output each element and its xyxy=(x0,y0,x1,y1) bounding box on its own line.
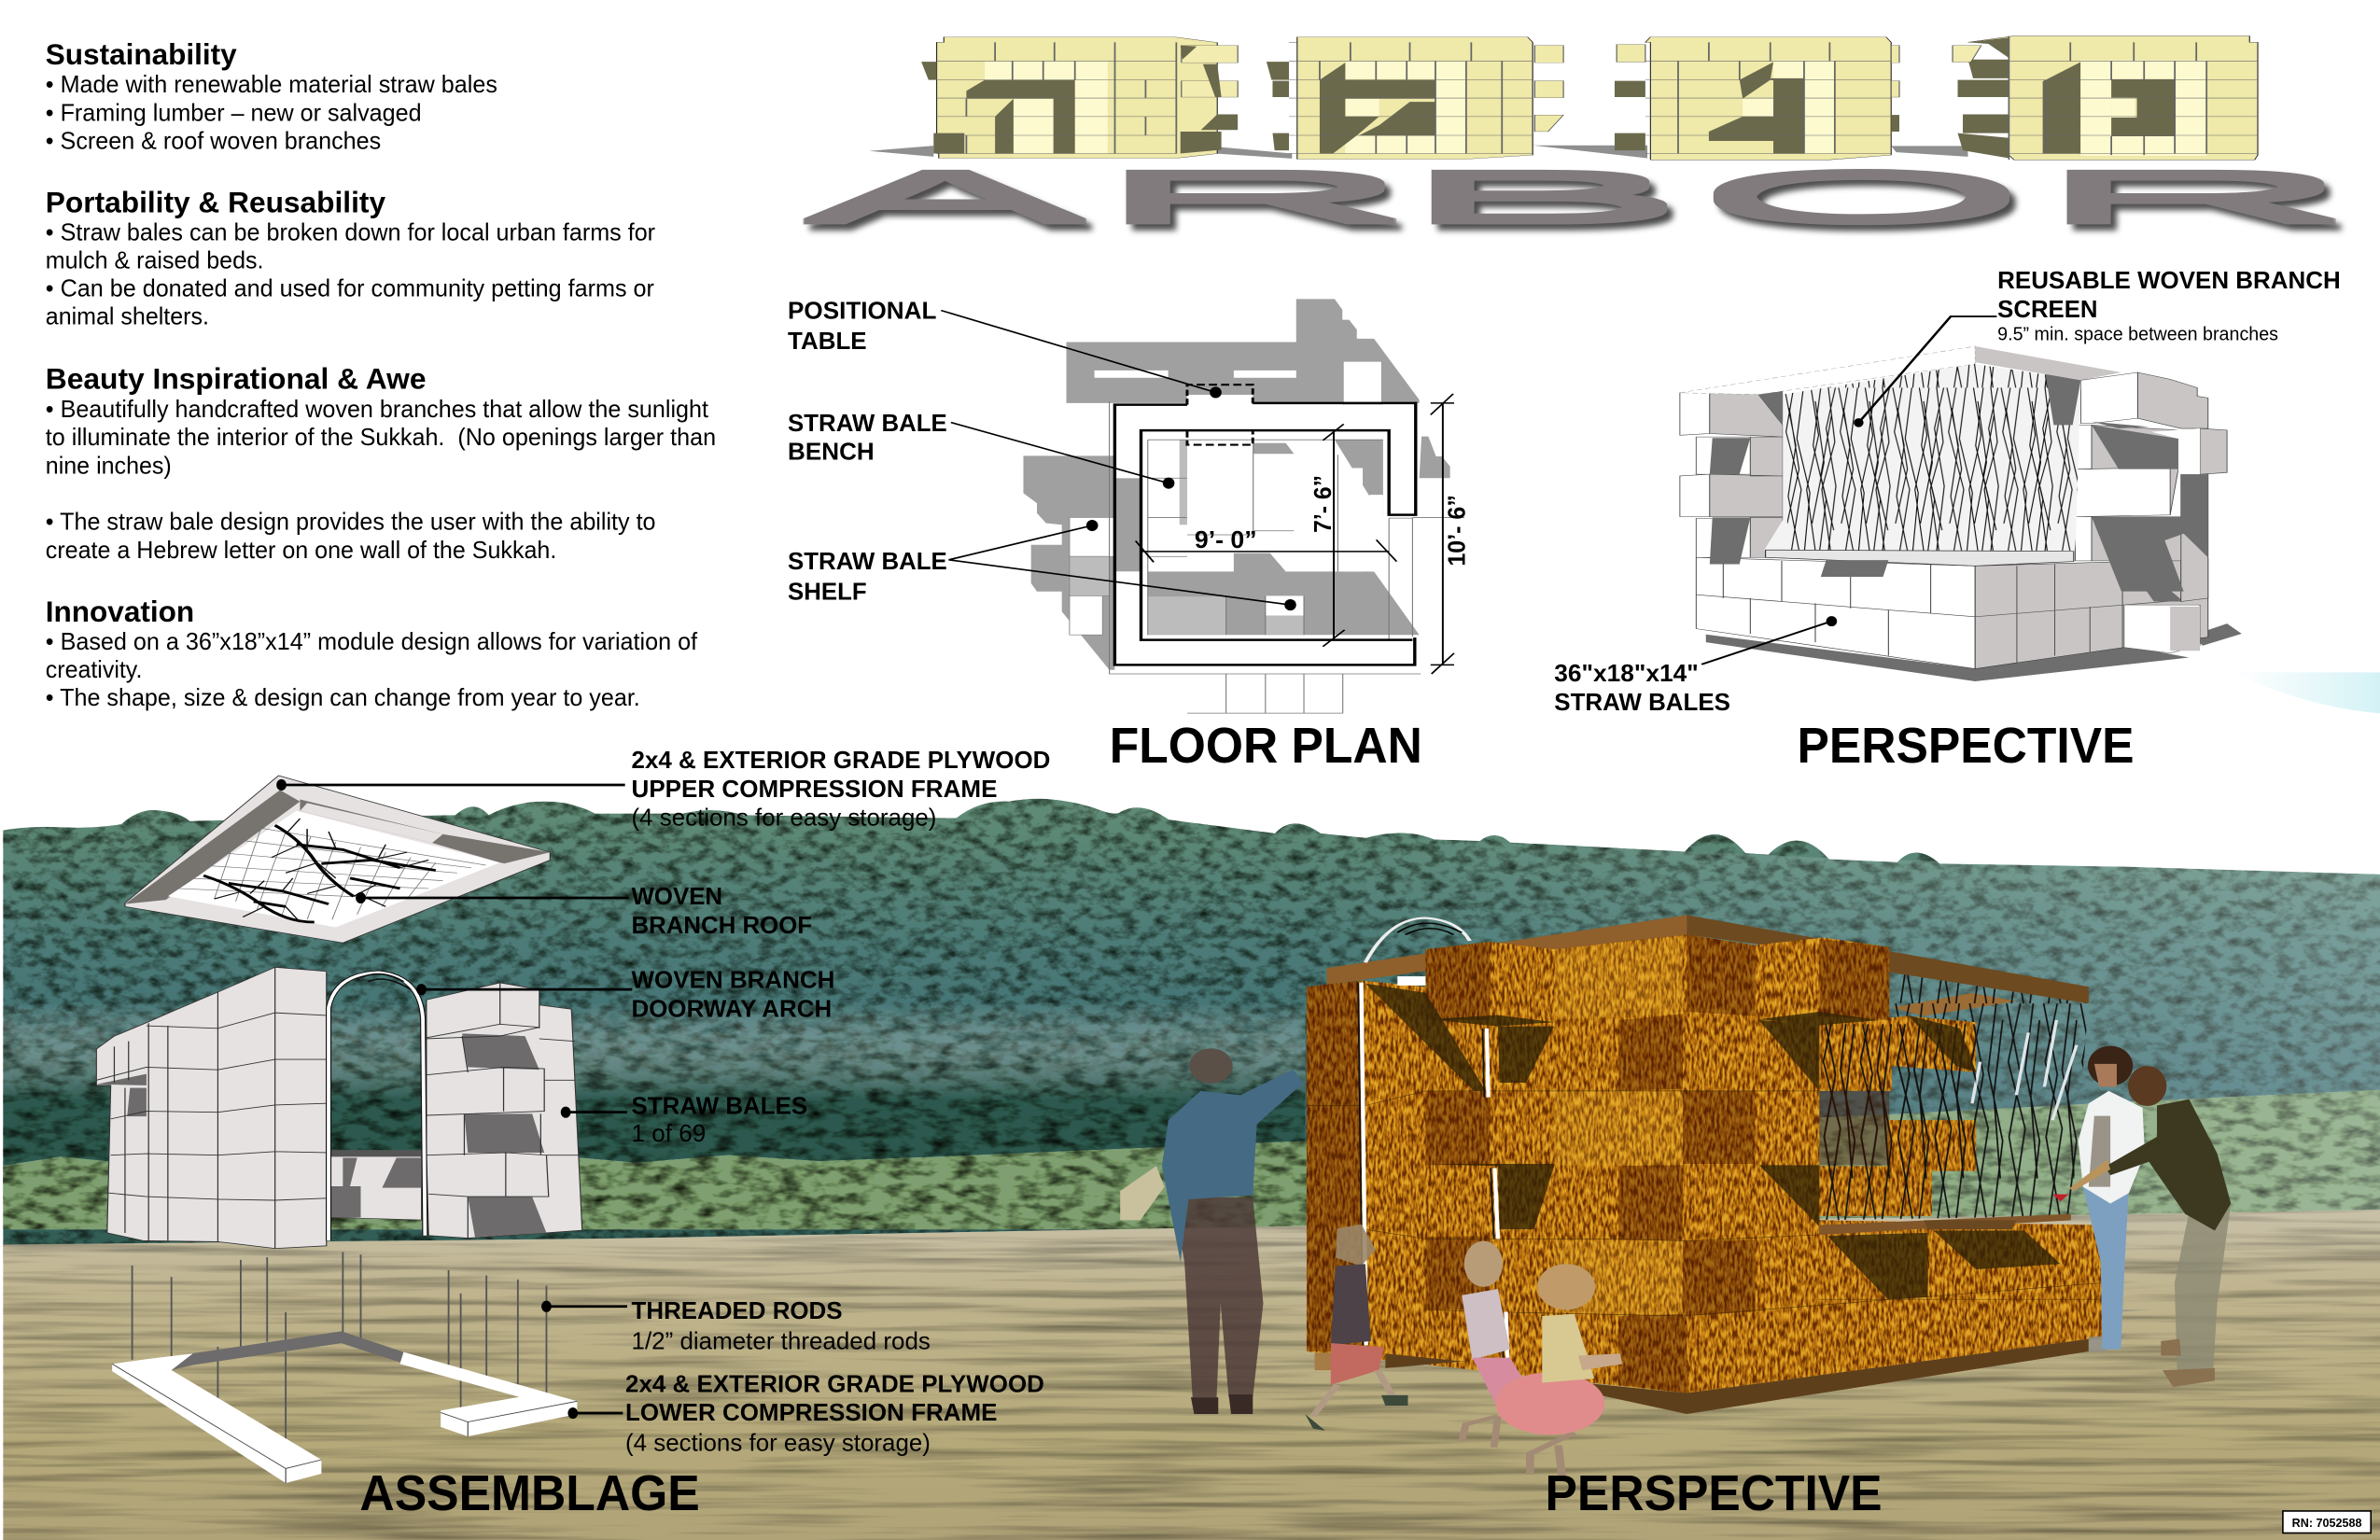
table opening xyxy=(1187,395,1253,405)
distant tree line xyxy=(3,1001,1306,1199)
bullets: innovation: • The shape, size & design can change from year to year. xyxy=(46,683,640,711)
text panel: design principles xyxy=(46,37,716,711)
bullets: portability xyxy=(46,217,655,330)
heading: perspective bottom: PERSPECTIVE xyxy=(1546,1465,1883,1521)
straw bale surfaces xyxy=(1307,934,2105,1393)
assemblage exploded diagram xyxy=(96,776,632,1483)
bullets: beauty: • The straw bale design provides the user with the ability to xyxy=(46,508,656,536)
title: ARBOR: O xyxy=(1694,158,2029,237)
cast shadows outside xyxy=(1023,299,1450,670)
assemblage labels: 1 of 69 xyxy=(632,1119,706,1147)
background landscape photo xyxy=(3,799,2380,1540)
assemblage labels: 1/2” diameter threaded rods xyxy=(632,1327,931,1355)
dashed table xyxy=(1187,385,1253,445)
perspective labels: 9.5” min. space between branches xyxy=(1997,324,2278,344)
window sill xyxy=(1766,550,2074,566)
bullets: sustainability: • Made with renewable material straw bales xyxy=(46,70,497,98)
letter block 3 xyxy=(1615,37,1899,160)
heading: floor plan: FLOOR PLAN xyxy=(1110,718,1422,774)
assemblage labels: LOWER COMPRESSION FRAME xyxy=(625,1398,997,1426)
title: ARBOR: B xyxy=(1396,158,1689,237)
girl with pink skirt xyxy=(1462,1241,1547,1448)
leader dots xyxy=(1086,386,1296,610)
right lower bales xyxy=(1975,559,2208,668)
heading: perspective top: PERSPECTIVE xyxy=(1798,718,2135,774)
assemblage labels: BRANCH ROOF xyxy=(632,911,812,939)
heading: beauty: Beauty Inspirational & Awe xyxy=(46,361,426,395)
assemblage labels xyxy=(625,746,1050,1457)
bullets: innovation: creativity. xyxy=(46,655,142,683)
floor plan labels xyxy=(788,297,947,605)
dimension labels xyxy=(1195,475,1470,567)
heading: portability: Portability & Reusability xyxy=(46,186,386,219)
assemblage labels: 2x4 & EXTERIOR GRADE PLYWOOD xyxy=(625,1369,1044,1397)
mist on hills xyxy=(1449,843,2380,1219)
letter block 2 xyxy=(1267,37,1563,160)
white model perspective xyxy=(1680,316,2242,681)
floor plan labels: SHELF xyxy=(788,577,867,605)
ground shadow xyxy=(1706,623,2242,681)
bullets: sustainability xyxy=(46,70,497,154)
leader dots xyxy=(1827,418,1864,626)
floor plan drawing xyxy=(941,299,1464,713)
thin bale lines xyxy=(1110,401,1464,713)
dimension labels: 7’- 6” xyxy=(1309,475,1337,533)
lower compression frame xyxy=(112,1331,577,1483)
bullets: portability: mulch & raised beds. xyxy=(46,246,263,274)
left tower bales xyxy=(1680,390,1750,557)
bullets: innovation: • Based on a 36”x18”x14” module design allows for variation of xyxy=(46,627,698,655)
leader lines xyxy=(281,785,632,1413)
leader dots xyxy=(276,779,578,1419)
leader line: screen xyxy=(1701,316,1996,665)
title: ARBOR: A xyxy=(803,158,1087,237)
threaded rods xyxy=(133,1252,546,1453)
assemblage labels: UPPER COMPRESSION FRAME xyxy=(632,775,997,803)
front lower bales xyxy=(1696,557,1975,668)
walls xyxy=(1114,403,1416,665)
bottom timber frame xyxy=(1385,1339,2089,1414)
dimension: 9 ft 0 xyxy=(1136,539,1396,562)
perspective labels: 36"x18"x14" xyxy=(1554,659,1699,687)
title: ARBOR: R xyxy=(1090,158,1417,237)
bale dark faces xyxy=(1307,918,2149,1414)
heading: sustainability: Sustainability xyxy=(46,37,237,71)
plan interior floor xyxy=(1114,405,1416,665)
field xyxy=(3,1210,2380,1540)
title graphic: straw bale Hebrew letters xyxy=(869,36,2258,160)
roof branches xyxy=(203,825,436,922)
bullets: beauty xyxy=(46,395,716,564)
bale outlines left of plan xyxy=(1070,517,1113,556)
man in dark hoodie xyxy=(2052,1066,2231,1387)
assemblage labels: 2x4 & EXTERIOR GRADE PLYWOOD xyxy=(632,746,1050,774)
woman in white jacket xyxy=(2079,1046,2145,1350)
ground shadows xyxy=(869,146,1968,159)
bullets: portability: • Can be donated and used for community petting farms or xyxy=(46,274,654,302)
bullets: sustainability: • Framing lumber – new or salvaged xyxy=(46,98,422,126)
bullets: sustainability: • Screen & roof woven branches xyxy=(46,126,381,154)
assemblage labels: WOVEN BRANCH xyxy=(632,966,834,994)
dimension: 10 ft 6 xyxy=(1431,394,1454,674)
perspective labels: REUSABLE WOVEN BRANCH xyxy=(1997,266,2341,294)
child with shorts xyxy=(1305,1225,1407,1431)
top fascia xyxy=(1680,346,1975,395)
horizontal bale seams xyxy=(1307,1091,2105,1316)
sky haze at right edge xyxy=(2232,672,2380,713)
woven branch screen xyxy=(1764,364,2080,551)
woven doorway arch xyxy=(329,973,425,1240)
floor plan labels: STRAW BALE xyxy=(788,547,947,575)
green bushes xyxy=(3,1090,2380,1229)
assemblage labels: THREADED RODS xyxy=(632,1296,843,1324)
leader lines xyxy=(941,311,1290,605)
heading: assemblage: ASSEMBLAGE xyxy=(359,1465,700,1521)
bullets: beauty: create a Hebrew letter on one wall of the Sukkah. xyxy=(46,536,556,564)
floor plan labels: STRAW BALE xyxy=(788,409,947,437)
assemblage labels: STRAW BALES xyxy=(632,1092,807,1120)
letter block 1 xyxy=(921,37,1238,159)
bullets: beauty: to illuminate the interior of the Sukkah. (No openings larger than xyxy=(46,423,716,451)
title: ARBOR xyxy=(803,158,2357,237)
bullets: portability: animal shelters. xyxy=(46,302,209,330)
title: ARBOR: R xyxy=(2031,158,2357,237)
registration number tag xyxy=(2283,1511,2371,1533)
right tower bales xyxy=(2092,372,2208,601)
branch screen xyxy=(1819,973,2089,1220)
bullets: portability: • Straw bales can be broken down for local urban farms for xyxy=(46,217,655,245)
bullets: innovation xyxy=(46,627,698,711)
cast shadows on ground xyxy=(2089,1309,2149,1351)
small white bale xyxy=(2124,605,2200,653)
assemblage labels: DOORWAY ARCH xyxy=(632,995,832,1023)
bullets: beauty: nine inches) xyxy=(46,451,172,479)
floor plan labels: BENCH xyxy=(788,438,875,466)
sukkah roof xyxy=(1326,915,2089,1015)
perspective labels xyxy=(1554,266,2341,716)
dimension: 7 ft 6 xyxy=(1323,424,1345,647)
right bale tower xyxy=(427,983,582,1239)
dimension labels: 10’- 6” xyxy=(1442,495,1470,567)
left bale tower xyxy=(96,967,327,1249)
man with raised arm xyxy=(1120,1048,1304,1414)
shelf ledge xyxy=(1819,1214,2071,1235)
straw bale rendering with people xyxy=(1120,915,2231,1477)
dimension labels: 9’- 0” xyxy=(1195,525,1257,553)
registration number tag: RN: 7052588 xyxy=(2292,1516,2361,1530)
back wall xyxy=(330,1150,422,1220)
floor plan labels: POSITIONAL xyxy=(788,297,937,325)
toddler with tutu xyxy=(1495,1264,1622,1477)
arch top xyxy=(1365,918,1470,962)
bale shadows xyxy=(1365,984,2061,1299)
white openings in shadow xyxy=(1095,371,1296,378)
bullets: beauty: • Beautifully handcrafted woven branches that allow the sunlight xyxy=(46,395,709,423)
letter block 4 xyxy=(1953,36,2258,160)
heading: innovation: Innovation xyxy=(46,595,194,628)
roof frame xyxy=(125,776,550,943)
perspective labels: SCREEN xyxy=(1997,295,2098,323)
floor plan labels: TABLE xyxy=(788,327,867,355)
assemblage labels: (4 sections for easy storage) xyxy=(625,1429,931,1457)
doorway strips xyxy=(1362,983,1507,1362)
perspective labels: STRAW BALES xyxy=(1554,688,1730,716)
hillside xyxy=(3,799,2380,1260)
assemblage labels: WOVEN xyxy=(632,882,722,910)
interior shadows xyxy=(1114,440,1420,635)
assemblage labels: (4 sections for easy storage) xyxy=(632,804,936,832)
